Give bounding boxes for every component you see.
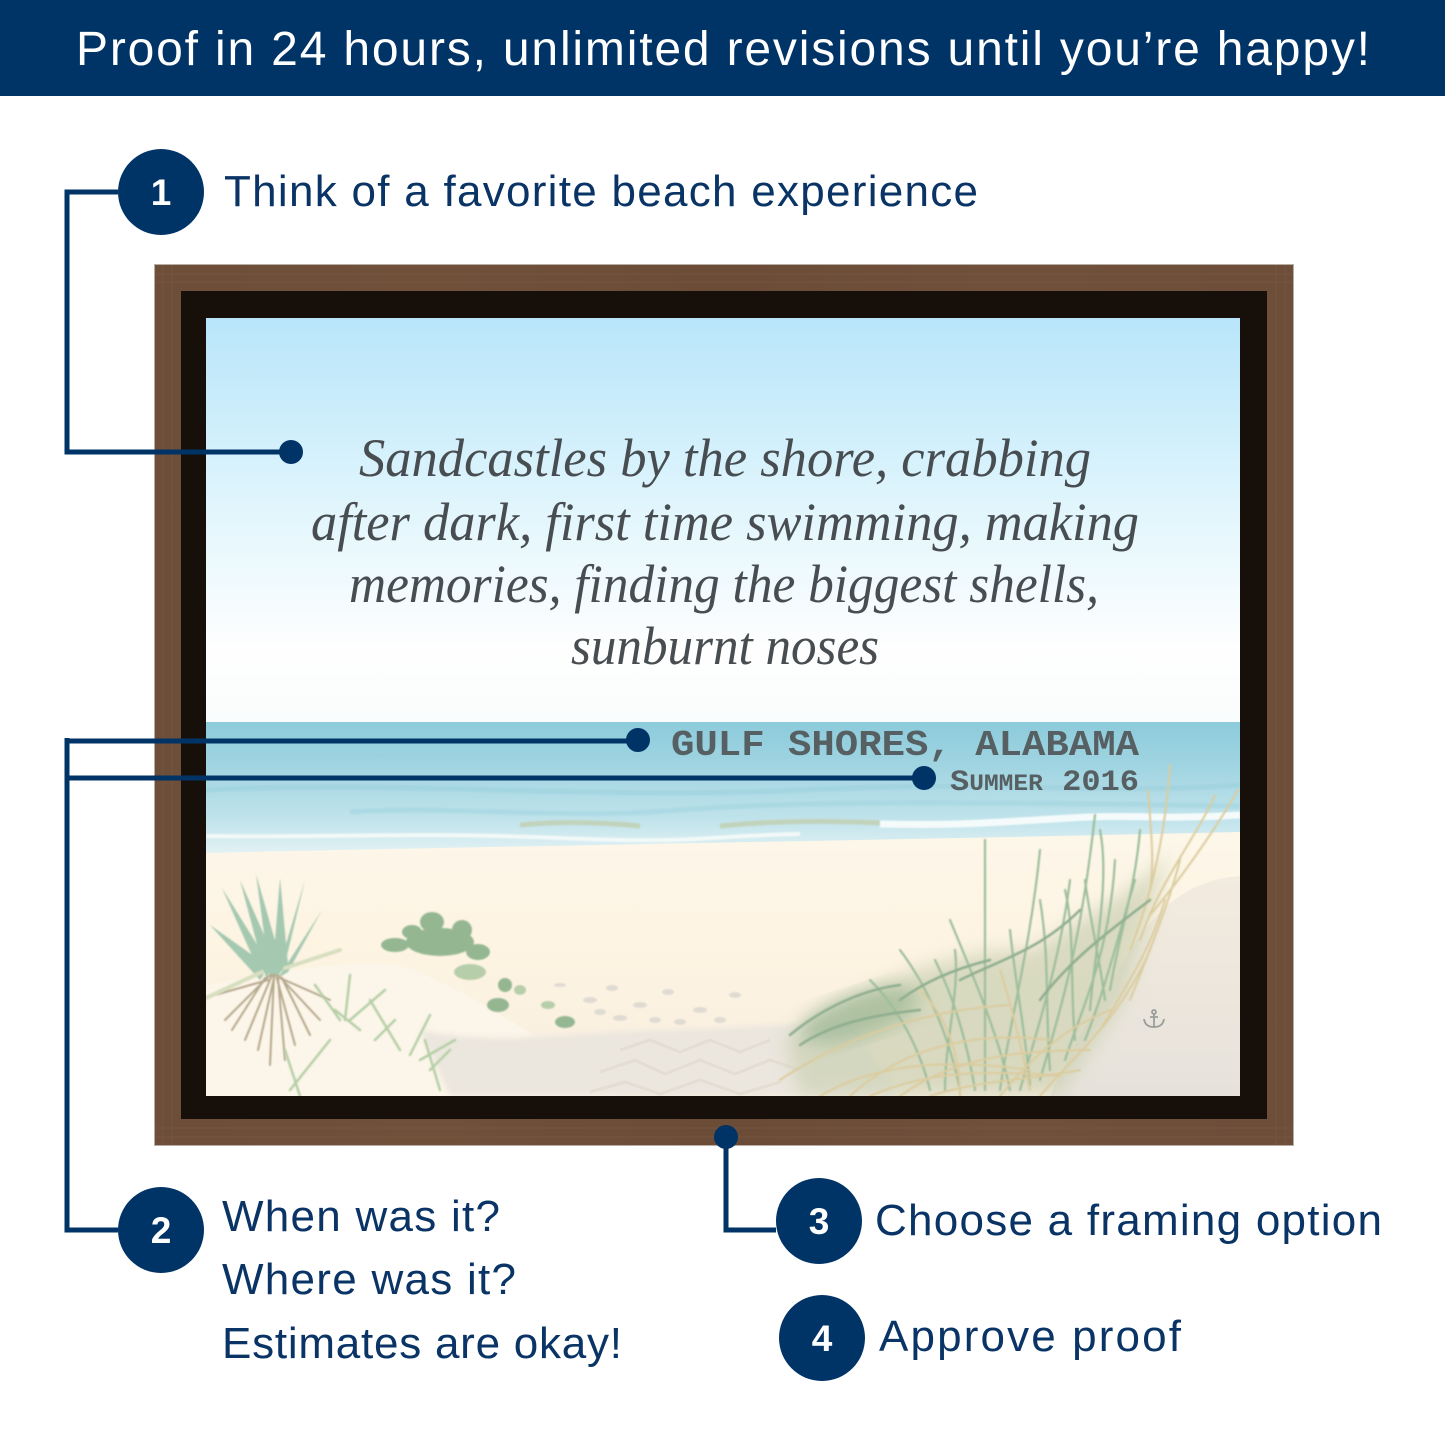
step 1 text: Think of a favorite beach experience <box>224 167 978 216</box>
sea <box>206 722 1240 857</box>
sentiment text: Sandcastles by the shore, crabbing <box>359 428 1091 488</box>
wood frame <box>154 264 1294 1146</box>
sky <box>206 318 1240 723</box>
sentiment text: memories, finding the biggest shells, <box>349 554 1099 614</box>
step 2 text: Estimates are okay! <box>222 1319 622 1368</box>
date text: SUMMER 2016 <box>950 766 1139 800</box>
step 3 badge <box>776 1178 862 1264</box>
step 1 badge: 1 <box>151 172 171 213</box>
sand ripples <box>590 1040 800 1094</box>
step 4 badge <box>779 1295 865 1381</box>
step 3 <box>776 1178 1382 1264</box>
step 2 text <box>222 1192 622 1368</box>
header text: Proof in 24 hours, unlimited revisions until you’re happy! <box>76 23 1370 76</box>
black inner frame <box>181 291 1267 1119</box>
connector 3 <box>714 1125 776 1230</box>
shrub on dune <box>381 912 575 1028</box>
step 2 badge: 2 <box>151 1210 171 1251</box>
step 1 badge <box>118 149 204 235</box>
low dune grass left <box>285 975 455 1096</box>
framed beach print <box>154 264 1294 1146</box>
step 4 badge: 4 <box>812 1318 833 1359</box>
shadow on sand <box>422 1024 802 1096</box>
agave plant <box>206 874 340 1065</box>
step 2 text: Where was it? <box>222 1255 516 1304</box>
step 4 <box>779 1295 1182 1381</box>
dark grass patch <box>794 975 926 1055</box>
beach grass mass <box>785 850 1170 1096</box>
step 3 badge: 3 <box>809 1201 829 1242</box>
right dune <box>1050 876 1240 1096</box>
icon: anchor watermark <box>1144 1010 1164 1027</box>
step 1 <box>118 149 978 235</box>
location text: GULF SHORES, ALABAMA <box>671 725 1139 766</box>
connector 2 <box>67 728 936 1230</box>
step 2 text: When was it? <box>222 1192 500 1241</box>
beach photo <box>206 318 1240 1096</box>
connector 1 <box>67 192 303 464</box>
sentiment text: sunburnt noses <box>571 616 879 676</box>
step 2 <box>118 1187 622 1368</box>
footprints <box>554 983 741 1025</box>
left dune <box>206 965 528 1096</box>
sentiment text: after dark, first time swimming, making <box>311 492 1139 552</box>
waves <box>206 785 1240 840</box>
step 2 badge <box>118 1187 204 1273</box>
beach grass right <box>780 765 1238 1096</box>
beach sand <box>206 832 1240 1096</box>
step 4 text: Approve proof <box>879 1312 1182 1361</box>
header banner <box>0 0 1445 96</box>
step 3 text: Choose a framing option <box>875 1196 1382 1245</box>
sentiment text <box>311 428 1139 676</box>
